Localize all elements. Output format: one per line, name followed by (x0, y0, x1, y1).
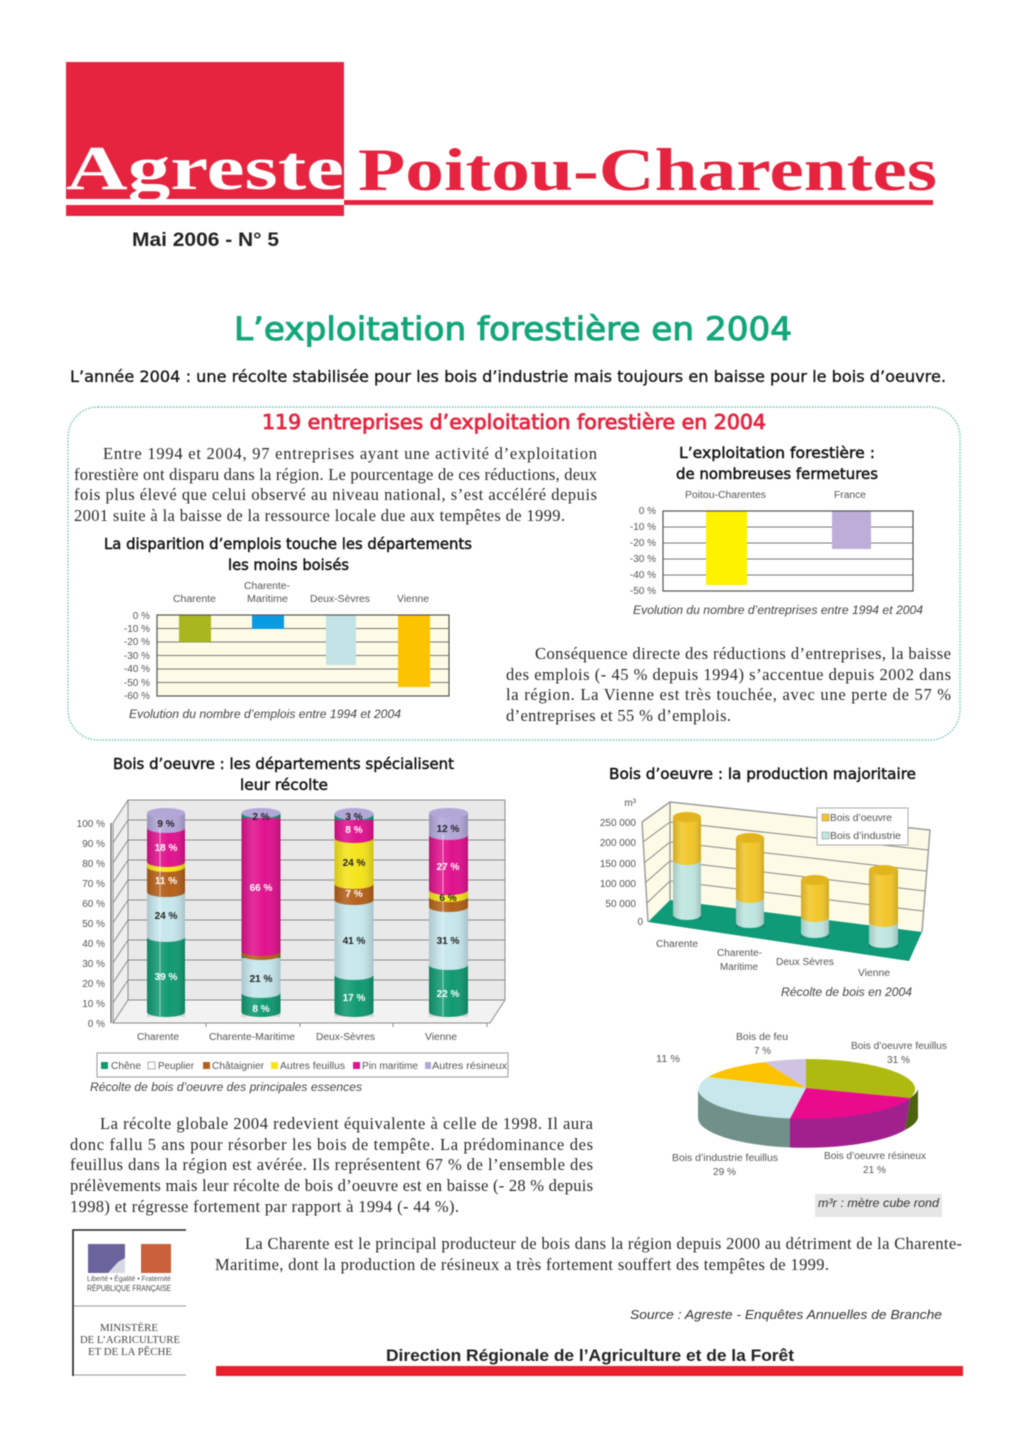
text block: global harvest: La récolte globale 2004 redevient équivalente à celle de 1998. Il aura (100, 1114, 594, 1133)
cylinder: Charente-Maritime: 66 % (250, 883, 273, 894)
logo: ministry of agriculture (73, 1230, 186, 1376)
y axis labels: 100 % (77, 819, 105, 830)
x axis labels: Vienne (858, 968, 890, 979)
y axis labels: 200 000 (600, 838, 636, 849)
y axis labels: 50 000 (605, 899, 636, 910)
bar chart: jobs by department: -40 % (124, 664, 150, 675)
text block: global harvest: 1998) et régresse fortement par rapport à 1994 (- 44 %). (70, 1197, 459, 1216)
cylinder: Deux-Sèvres: 24 % (343, 858, 366, 869)
cylinder: Deux-Sèvres (801, 875, 829, 938)
3D cylinder chart: production (600, 798, 930, 979)
bar chart: firms Poitou-Charentes vs France: -20 % (630, 538, 656, 549)
cylinder: Vienne: 12 % (437, 824, 460, 835)
bar chart: jobs by department: Deux-Sèvres (310, 594, 370, 605)
text block: Charente: Maritime, dont la production de résineux a très fortement souffert des tempêtes de 1999. (215, 1255, 829, 1274)
text block: disappearance of firms: fois plus élevé que celui observé au niveau national, s’est accéléré depuis (74, 485, 597, 504)
x axis labels (656, 939, 890, 979)
heading: production chart: Bois d’oeuvre : la production majoritaire (609, 765, 916, 783)
3D pie chart: wood use: Bois d’oeuvre résineux (824, 1151, 926, 1162)
y axis labels: m³ (624, 798, 637, 809)
text block: consequences: d’entreprises et 55 % d’emplois. (506, 706, 731, 725)
3D pie chart: wood use: 31 % (887, 1055, 910, 1066)
note: unit definition (815, 1194, 942, 1217)
3D pie chart: wood use: Bois d’industrie feuillus (672, 1153, 778, 1164)
x axis labels: Charente-Maritime (209, 1032, 295, 1043)
caption: production chart: Récolte de bois en 2004 (781, 987, 912, 999)
cylinder: Vienne (869, 865, 898, 948)
cylinder: Vienne: 22 % (437, 989, 460, 1000)
masthead: Agreste Poitou-Charentes: Agreste (66, 135, 344, 203)
note: unit definition: m³r : mètre cube rond (818, 1196, 939, 1210)
bar chart: jobs by department: -20 % (124, 637, 150, 648)
heading: jobs chart (104, 535, 472, 574)
logo: ministry of agriculture: ET DE LA PÊCHE (88, 1346, 172, 1358)
cylinder: Vienne: 6 % (439, 893, 457, 904)
heading: species chart (113, 755, 454, 794)
x axis labels: Charente (137, 1032, 179, 1043)
caption: firms chart: Evolution du nombre d’entreprises entre 1994 et 2004 (633, 605, 923, 617)
cylinder: Deux-Sèvres (334, 808, 374, 1017)
text block: disappearance of firms: forestière ont disparu dans la région. Le pourcentage de ces réductions, deux (74, 465, 598, 484)
footer red bar (216, 1366, 963, 1376)
text block: consequences: des emplois (- 45 % depuis 1994) s’accentue depuis 2002 dans (506, 665, 951, 684)
bar chart: jobs by department: Charente (173, 594, 216, 605)
cylinder: Charente-Maritime (736, 833, 764, 928)
source line: Source : Agreste - Enquêtes Annuelles de Branche (630, 1307, 942, 1322)
cylinder: Charente: 39 % (155, 972, 178, 983)
legend: production (817, 808, 908, 845)
logo: ministry of agriculture: DE L’AGRICULTURE (80, 1335, 180, 1346)
bar chart: jobs by department: -60 % (124, 691, 150, 702)
cylinder: Charente: 11 % (155, 876, 177, 887)
cylinder: Vienne (429, 808, 468, 1017)
3D pie chart: wood use: 21 % (863, 1165, 886, 1176)
heading: species chart: leur récolte (240, 776, 328, 794)
y axis labels: 10 % (82, 999, 105, 1010)
text block: disappearance of firms: Entre 1994 et 2004, 97 entreprises ayant une activité d’exploitation (103, 444, 597, 463)
y axis labels: 0 % (88, 1019, 105, 1030)
text block: global harvest: prélèvements mais leur récolte de bois d’oeuvre est en baisse (- 28 % depuis (70, 1176, 593, 1195)
3D pie chart: wood use (656, 1032, 947, 1178)
legend: species: Peuplier (158, 1061, 195, 1072)
y axis labels (77, 819, 105, 1030)
logo: ministry of agriculture: RÉPUBLIQUE FRANÇAISE (87, 1284, 171, 1293)
text block: consequences: Conséquence directe des réductions d’entreprises, la baisse (535, 644, 951, 663)
x axis labels: Deux-Sèvres (316, 1032, 375, 1043)
caption: jobs chart: Evolution du nombre d’emplois entre 1994 et 2004 (129, 709, 401, 721)
bar chart: firms Poitou-Charentes vs France: -30 % (630, 554, 656, 565)
cylinder: Charente (147, 808, 185, 1017)
x axis labels: Maritime (720, 962, 758, 973)
issue date: Mai 2006 - N° 5 (132, 230, 279, 251)
cylinder: Charente (673, 812, 701, 920)
legend: production: Bois d’oeuvre (830, 813, 892, 824)
x axis labels: Vienne (425, 1032, 457, 1043)
3D pie chart: wood use: 7 % (754, 1046, 771, 1057)
bar chart: jobs by department: -30 % (124, 651, 150, 662)
3D pie chart: wood use: 29 % (713, 1167, 736, 1178)
bar chart: firms Poitou-Charentes vs France: Poitou-Charentes (685, 490, 766, 501)
x axis labels: Charente (656, 939, 698, 950)
bar chart: firms Poitou-Charentes vs France: France (834, 490, 866, 501)
cylinder: Vienne: 31 % (437, 936, 460, 947)
heading: firms chart: L’exploitation forestière : (679, 444, 875, 462)
cylinder: Deux-Sèvres: 8 % (345, 825, 363, 836)
footer: publisher: Direction Régionale de l’Agriculture et de la Forêt (386, 1347, 795, 1365)
caption: species chart: Récolte de bois d’oeuvre des principales essences (90, 1082, 362, 1094)
heading: species chart: Bois d’oeuvre : les départements spécialisent (113, 755, 454, 773)
y axis labels: 250 000 (600, 818, 636, 829)
cylinder: Vienne: 27 % (437, 862, 460, 873)
legend: production: Bois d’industrie (830, 831, 901, 842)
cylinder: Charente-Maritime: 2 % (252, 812, 270, 823)
text block: global harvest (70, 1114, 594, 1216)
x axis labels: Charente- (717, 948, 762, 959)
bar chart: firms Poitou-Charentes vs France (630, 490, 913, 597)
logo: ministry of agriculture: Liberté • Égalité • Fraternité (87, 1274, 171, 1283)
cylinder: Charente: 9 % (157, 819, 175, 830)
icon: Marianne flag (88, 1244, 171, 1273)
heading: jobs chart: les moins boisés (228, 556, 349, 574)
logo: ministry of agriculture: MINISTÈRE (100, 1322, 158, 1334)
text block: consequences: la région. La Vienne est très touchée, avec une perte de 57 % (506, 685, 951, 704)
legend: species: Autres feuillus (280, 1061, 345, 1072)
cylinder: Charente-Maritime (242, 808, 280, 1017)
bar chart: jobs by department: Vienne (397, 594, 429, 605)
y axis labels: 60 % (82, 899, 105, 910)
legend: species: Autres résineux (432, 1061, 507, 1072)
bar chart: jobs by department: -50 % (124, 678, 150, 689)
bar chart: jobs by department: -10 % (124, 624, 150, 635)
masthead: Agreste Poitou-Charentes (66, 62, 937, 216)
y axis labels: 90 % (82, 839, 105, 850)
y axis labels: 150 000 (600, 859, 636, 870)
3D pie chart: wood use: Bois d’oeuvre feuillus (851, 1041, 947, 1052)
text block: global harvest: feuillus dans la région est avérée. Ils représentent 67 % de l’ensemble des (70, 1155, 593, 1174)
y axis labels: 40 % (82, 939, 105, 950)
3D stacked cylinder chart: species (77, 800, 505, 1043)
title: L’exploitation forestière en 2004 (234, 310, 792, 348)
x axis labels (137, 1032, 457, 1043)
y axis labels: 30 % (82, 959, 105, 970)
bar chart: jobs by department: 0 % (133, 611, 150, 622)
cylinder: Charente-Maritime: 21 % (250, 974, 273, 985)
y axis labels: 80 % (82, 859, 105, 870)
bar chart: jobs by department: Maritime (247, 594, 288, 605)
text block: Charente: La Charente est le principal producteur de bois dans la région depuis 2000 au détriment de la Charente- (245, 1234, 962, 1253)
bar chart: jobs by department (124, 581, 449, 702)
bar chart: firms Poitou-Charentes vs France: -10 % (630, 522, 656, 533)
3D pie chart: wood use: Bois de feu (736, 1032, 788, 1043)
bar chart: firms Poitou-Charentes vs France: 0 % (639, 506, 656, 517)
panel heading: 119 entreprises d’exploitation forestière en 2004 (262, 410, 766, 434)
x axis labels: Deux Sèvres (776, 957, 834, 968)
y axis labels: 0 (637, 917, 643, 928)
cylinder: Charente: 24 % (155, 911, 178, 922)
legend: species (97, 1053, 508, 1077)
y axis labels (600, 798, 643, 928)
bar chart: firms Poitou-Charentes vs France: -40 % (630, 570, 656, 581)
text block: global harvest: donc fallu 5 ans pour résorber les bois de tempête. La prédominance des (70, 1135, 593, 1154)
text block: consequences (506, 644, 951, 725)
cylinder: Deux-Sèvres: 17 % (343, 993, 366, 1004)
y axis labels: 50 % (82, 919, 105, 930)
heading: jobs chart: La disparition d’emplois touche les départements (104, 535, 472, 553)
heading: firms chart (676, 444, 878, 483)
3D pie chart: wood use: 11 % (656, 1054, 680, 1065)
text block: Charente (215, 1234, 962, 1274)
cylinder: Deux-Sèvres: 3 % (345, 812, 363, 823)
y axis labels: 70 % (82, 879, 105, 890)
y axis labels: 100 000 (600, 879, 636, 890)
legend: species: Pin maritime (362, 1061, 418, 1072)
text block: disappearance of firms (74, 444, 598, 525)
legend: species: Châtaignier (212, 1061, 265, 1072)
masthead: Agreste Poitou-Charentes: Poitou-Charentes (358, 137, 937, 203)
y axis labels: 20 % (82, 979, 105, 990)
subtitle: L’année 2004 : une récolte stabilisée pour les bois d’industrie mais toujours en baisse pour le bois d’oeuvre. (70, 367, 946, 386)
bar chart: firms Poitou-Charentes vs France: -50 % (630, 586, 656, 597)
legend: species: Chêne (111, 1061, 141, 1072)
panel: 119 entreprises (68, 407, 960, 740)
heading: firms chart: de nombreuses fermetures (676, 465, 878, 483)
cylinder: Charente: 18 % (155, 843, 178, 854)
cylinder: Charente-Maritime: 8 % (252, 1004, 270, 1015)
cylinder: Deux-Sèvres: 41 % (343, 936, 366, 947)
cylinder: Deux-Sèvres: 7 % (345, 889, 363, 900)
bar chart: jobs by department: Charente- (244, 581, 290, 592)
text block: disappearance of firms: 2001 suite à la baisse de la ressource locale due aux tempêtes de 1999. (74, 506, 565, 525)
